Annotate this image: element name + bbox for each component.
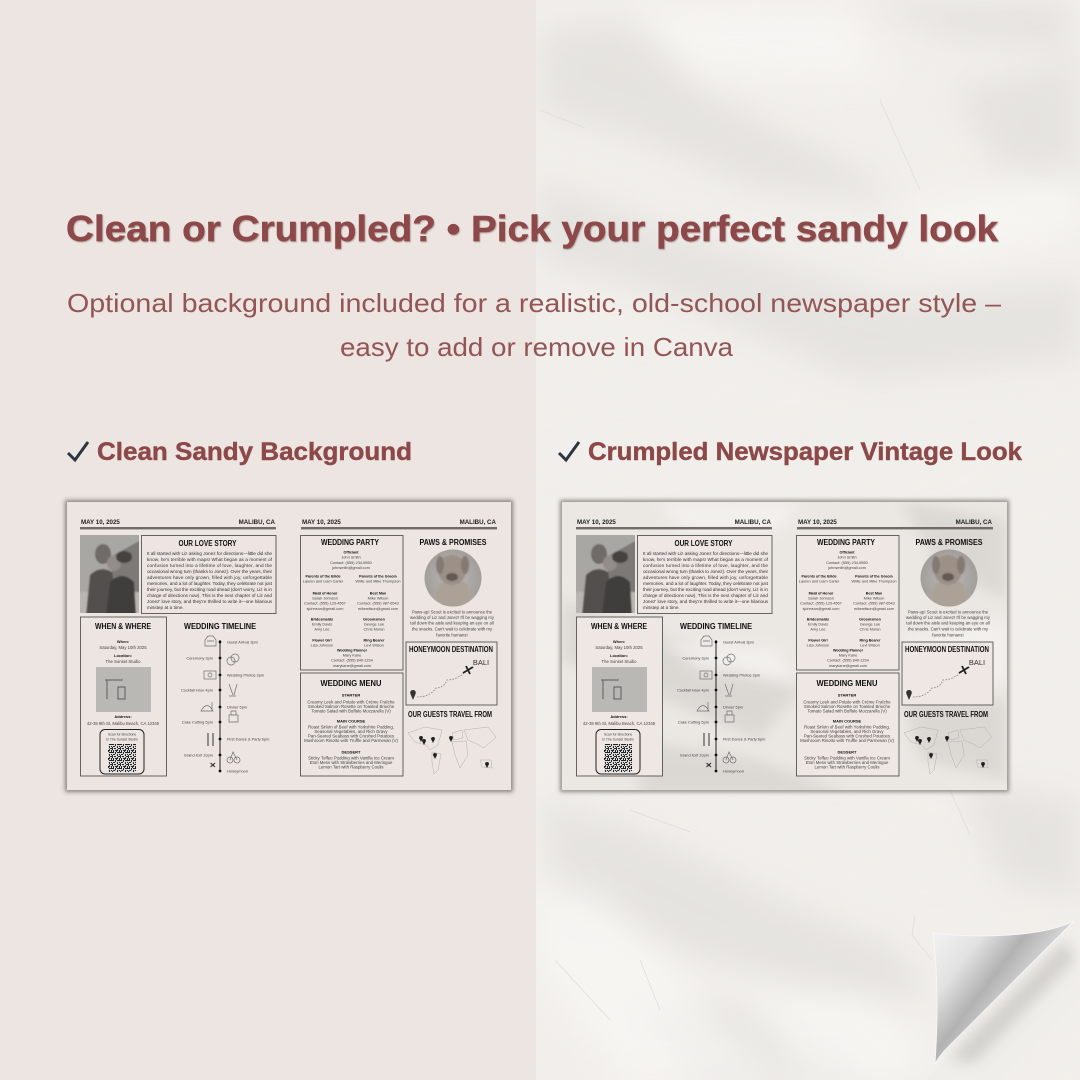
panel: wedding menu: MAIN COURSE	[337, 718, 366, 724]
panel: wedding party: Amy Lee	[810, 628, 826, 632]
panel: when and where: Address:	[114, 714, 132, 719]
panel: wedding menu: STARTER	[342, 692, 360, 698]
chart: wedding timeline	[677, 621, 765, 774]
icon: check mark right	[559, 442, 579, 460]
panel: wedding party: Contact: (555) 987-6543	[853, 602, 895, 606]
left page header: MALIBU, CA	[239, 519, 276, 526]
panel: wedding party: Flower Girl	[312, 638, 332, 642]
panel: wedding menu: WEDDING MENU	[320, 678, 382, 688]
panel: our love story: OUR LOVE STORY	[178, 538, 237, 548]
panel: wedding menu: Tomato Salad with Buffalo Mozzarella (V)	[311, 708, 391, 714]
title: Clean or Crumpled? • Pick your perfect sandy look	[66, 208, 999, 249]
left page header: MAY 10, 2025	[577, 519, 616, 526]
chart: wedding timeline: WEDDING TIMELINE	[680, 621, 752, 631]
panel: honeymoon destination: BALI	[473, 658, 489, 667]
chart: wedding timeline: Guest Arrival 3pm	[723, 640, 754, 644]
panel: paws and promises: wedding of Liz and Jonez! I'll be wagging my	[906, 615, 991, 620]
panel: wedding menu	[300, 673, 403, 776]
right page header: MALIBU, CA	[956, 519, 993, 526]
panel: paws and promises: favorite humans!	[436, 632, 468, 638]
panel: clean newspaper preview	[65, 500, 513, 792]
panel: wedding party: sjohnson@gmail.com	[307, 607, 343, 611]
panel: our love story: occasional wrong turn (thanks to Jonez). Over the years, their	[147, 569, 272, 574]
panel: wedding party: johnsmith@gmail.com	[827, 566, 866, 570]
chart: wedding timeline	[181, 621, 269, 774]
panel: our love story: It all started with Liz asking Jonez for directions—little did she	[643, 551, 768, 556]
panel: honeymoon destination: HONEYMOON DESTINATION	[905, 644, 989, 654]
panel: honeymoon destination	[902, 642, 993, 705]
panel: wedding party: Contact: (555) 840-1234	[331, 658, 374, 662]
chart: wedding timeline: WEDDING TIMELINE	[184, 621, 256, 631]
panel: wedding party: Mike Wilson	[864, 596, 884, 600]
panel: when and where: Scan for directions	[108, 732, 136, 736]
chart: wedding timeline: Cake Cutting 5pm	[182, 720, 213, 724]
panel: wedding party: marykane@gmail.com	[333, 664, 371, 668]
panel: crumpled newspaper preview	[560, 500, 1009, 800]
panel: wedding menu: Sticky Toffee Pudding with Vanilla Ice Cream	[804, 756, 890, 760]
panel: wedding party: WEDDING PARTY	[321, 537, 379, 547]
panel: wedding party: John Smith	[837, 556, 857, 560]
panel: our love story: confusion turned into a lifetime of love, laughter, and the	[643, 563, 768, 568]
panel: when and where: When:	[117, 639, 129, 644]
panel: our love story: misstep at a time.	[643, 605, 680, 610]
panel: when and where: Saturday, May 10th 2025	[595, 645, 643, 650]
panel: our love story: misstep at a time.	[147, 605, 184, 610]
panel: wedding menu: Tomato Salad with Buffalo Mozzarella (V)	[807, 708, 887, 714]
panel: wedding party: Wedding Planner	[337, 648, 368, 652]
panel: when and where: 42-38 9th St, Malibu Beach, CA 12345	[87, 721, 160, 726]
right page header	[301, 519, 497, 529]
panel: wedding party: Willie and Mike Thompson	[355, 580, 401, 584]
chart: wedding timeline: Dinner 5pm	[227, 704, 247, 710]
panel: paws and promises: PAWS & PROMISES	[420, 537, 487, 547]
panel: wedding party: Willie and Mike Thompson	[851, 580, 897, 584]
panel: when and where: Address:	[610, 714, 628, 719]
panel: honeymoon destination: BALI	[969, 658, 985, 667]
panel: wedding menu: Seasonal Vegetables, and Rich Gravy	[810, 729, 884, 734]
panel: wedding party: John Smith	[341, 556, 361, 560]
panel: wedding party: Ring Bearer	[860, 638, 881, 642]
panel: paws and promises: the snacks. Can't wait to celebrate with my	[412, 626, 493, 632]
right page header	[797, 519, 993, 529]
panel: when and where: When:	[613, 639, 625, 644]
right page header: MAY 10, 2025	[302, 519, 341, 526]
panel: wedding party	[796, 536, 899, 670]
panel: when and where: Location:	[610, 653, 628, 658]
right page header: MALIBU, CA	[460, 519, 497, 526]
panel: wedding menu: MAIN COURSE	[833, 718, 862, 724]
panel: paws and promises: Paws-up! Scout is excited to announce the	[412, 610, 493, 614]
panel: when and where: WHEN & WHERE	[591, 621, 647, 631]
panel: when and where: The Sunset Studio	[602, 659, 637, 664]
panel: wedding party: WEDDING PARTY	[817, 537, 875, 547]
panel: wedding menu: Eton Mess with Strawberries and Meringue	[806, 760, 889, 765]
panel: honeymoon destination: HONEYMOON DESTINATION	[409, 644, 493, 654]
panel: our love story: adventures have only grown, filled with joy, unforgettable	[643, 575, 768, 580]
panel: when and where: Scan for directions	[604, 732, 632, 736]
panel: wedding party: Contact: (555) 234-5550	[826, 561, 868, 565]
panel: wedding party: Contact: (555) 123-4567	[304, 602, 346, 606]
chart: wedding timeline: Cocktail Hour 4pm	[181, 688, 213, 692]
panel: when and where: The Sunset Studio	[106, 659, 141, 664]
panel: when and where: Saturday, May 10th 2025	[99, 645, 147, 650]
panel: wedding party: Best Man	[370, 592, 387, 596]
panel: when and where	[576, 617, 662, 776]
panel: wedding party: Maid of Honor	[313, 592, 338, 596]
panel: wedding menu: Seasonal Vegetables, and Rich Gravy	[314, 729, 388, 734]
chart: wedding timeline: Honeymoon	[723, 768, 744, 774]
crumpled paper background	[536, 0, 1080, 1080]
timeline icons	[201, 636, 240, 763]
chart: wedding timeline: Honeymoon	[227, 768, 248, 774]
panel: wedding party: mikewilson@gmail.com	[854, 607, 894, 611]
left page header: MAY 10, 2025	[81, 519, 120, 526]
panel: wedding party: Emily Davis	[312, 622, 332, 626]
panel: wedding party: Officiant	[344, 550, 359, 554]
panel: wedding party: Lauren and Liam Carter	[799, 580, 840, 584]
chart: wedding timeline: Grand Exit 10pm	[680, 752, 709, 758]
panel: wedding party: Levi Wilson	[364, 644, 384, 648]
heading: clean sandy background: Clean Sandy Background	[97, 438, 412, 466]
chart: wedding timeline: Dinner 5pm	[723, 704, 743, 710]
chart: wedding timeline: First Dance & Party 6pm	[723, 736, 765, 742]
panel: wedding party: George Lee	[860, 622, 880, 626]
panel: our love story: charge of directions now). This is the next chapter of Liz and	[147, 593, 272, 598]
panel: our love story: Jonez' love story, and they're thrilled to write it—one hilarious	[147, 599, 273, 604]
panel: our love story: know, he's terrible with maps! What began as a moment of	[147, 557, 273, 562]
panel: wedding party: Ring Bearer	[364, 638, 385, 642]
panel: wedding party: Emily Davis	[808, 622, 828, 626]
panel: paws and promises: tail down the aisle and keeping an eye on all	[906, 620, 990, 626]
panel: wedding menu: Lemon Tart with Raspberry Coulis	[814, 764, 880, 770]
left page header	[80, 519, 276, 529]
panel: wedding party: Amy Lee	[314, 628, 330, 632]
panel: wedding party: sjohnson@gmail.com	[803, 607, 839, 611]
panel: wedding party: Bridesmaids	[311, 618, 333, 622]
chart: wedding timeline: Cocktail Hour 4pm	[677, 688, 709, 692]
panel: wedding menu: Smoked Salmon Rosette on Toasted Brioche	[804, 704, 891, 709]
panel: wedding party: Mary Kane	[343, 654, 361, 658]
panel: our love story: charge of directions now). This is the next chapter of Liz and	[643, 593, 768, 598]
panel: wedding menu: Roast Sirloin of Beef with Yorkshire Pudding,	[308, 724, 394, 730]
panel: paws and promises: tail down the aisle and keeping an eye on all	[410, 620, 494, 626]
panel: paws and promises: PAWS & PROMISES	[916, 537, 983, 547]
photo: couple	[576, 535, 635, 613]
chart: guest world map	[904, 727, 992, 774]
panel: our love story: Jonez' love story, and they're thrilled to write it—one hilarious	[643, 599, 769, 604]
panel: wedding party: Parents of the Groom	[359, 574, 398, 578]
panel: our love story	[142, 536, 276, 614]
subtitle	[67, 288, 1002, 362]
panel: wedding menu: DESSERT	[342, 750, 361, 754]
panel: wedding party: Bridesmaids	[807, 618, 829, 622]
chart: wedding timeline: Ceremony 3pm	[682, 656, 709, 660]
panel: wedding party: Lauren and Liam Carter	[303, 580, 344, 584]
panel: wedding party: Mike Wilson	[368, 596, 388, 600]
panel: wedding party: Levi Wilson	[860, 644, 880, 648]
icon: check mark left	[68, 442, 88, 460]
panel: wedding menu: Mushroom Risotto with Truffle and Parmesan (V)	[800, 738, 894, 743]
panel: wedding party: Lisa Johnson	[311, 644, 333, 648]
panel: paws and promises	[410, 537, 495, 638]
panel: paws and promises: the snacks. Can't wait to celebrate with my	[908, 626, 989, 632]
panel: wedding menu: Smoked Salmon Rosette on Toasted Brioche	[308, 704, 395, 709]
panel: when and where: to The Sunset Studio	[106, 738, 138, 742]
panel: our love story: know, he's terrible with maps! What began as a moment of	[643, 557, 769, 562]
panel: wedding party: Sarah Johnson	[312, 596, 338, 600]
panel: wedding party: Flower Girl	[808, 638, 828, 642]
panel: wedding menu: Sticky Toffee Pudding with Vanilla Ice Cream	[308, 756, 394, 760]
panel: wedding party: Chris Moran	[860, 628, 880, 632]
panel: wedding party: Groomsmen	[363, 618, 386, 622]
panel: when and where: Location:	[114, 653, 132, 658]
panel: wedding menu: Eton Mess with Strawberries and Meringue	[310, 760, 393, 765]
panel: paws and promises: favorite humans!	[932, 632, 964, 638]
panel: wedding party: johnsmith@gmail.com	[331, 566, 370, 570]
panel: wedding party: George Lee	[364, 622, 384, 626]
panel: wedding menu	[796, 673, 899, 776]
timeline icons	[697, 636, 736, 763]
panel: our love story: occasional wrong turn (thanks to Jonez). Over the years, their	[643, 569, 768, 574]
panel: wedding party: Parents of the Bride	[801, 574, 837, 578]
panel: when and where: to The Sunset Studio	[602, 738, 634, 742]
panel: our love story: adventures have only grown, filled with joy, unforgettable	[147, 575, 272, 580]
panel: wedding party	[300, 536, 403, 670]
panel: wedding party: marykane@gmail.com	[829, 664, 867, 668]
panel: when and where: WHEN & WHERE	[95, 621, 151, 631]
panel: wedding party: Sarah Johnson	[808, 596, 834, 600]
panel: wedding party: Mary Kane	[839, 654, 857, 658]
panel: wedding party: Maid of Honor	[809, 592, 834, 596]
chart: guest world map	[408, 727, 496, 774]
panel: wedding party: Contact: (555) 987-6543	[357, 602, 399, 606]
heading: our guests travel from: OUR GUESTS TRAVEL FROM	[408, 709, 492, 719]
panel: wedding menu: Mushroom Risotto with Truffle and Parmesan (V)	[304, 738, 398, 743]
panel: wedding party: Best Man	[866, 592, 883, 596]
panel: wedding party: Contact: (555) 234-5550	[330, 561, 372, 565]
panel: wedding menu: Creamy Leek and Potato with Crème Fraîche	[803, 700, 891, 704]
panel: wedding party: mikewilson@gmail.com	[358, 607, 398, 611]
chart: wedding timeline: Ceremony 3pm	[186, 656, 213, 660]
panel: paws and promises	[906, 537, 991, 638]
panel: our love story	[638, 536, 772, 614]
panel: wedding party: Wedding Planner	[833, 648, 864, 652]
panel: our love story: OUR LOVE STORY	[674, 538, 733, 548]
chart: wedding timeline: First Dance & Party 6pm	[227, 736, 269, 742]
panel: wedding party: Parents of the Groom	[855, 574, 894, 578]
panel: wedding menu: WEDDING MENU	[816, 678, 878, 688]
left page header: MALIBU, CA	[735, 519, 772, 526]
panel: when and where	[80, 617, 166, 776]
heading: crumpled newspaper: Crumpled Newspaper Vintage Look	[588, 438, 1022, 466]
panel: wedding menu: STARTER	[838, 692, 856, 698]
panel: paws and promises: Paws-up! Scout is excited to announce the	[908, 610, 989, 614]
panel: our love story: their journey, but the exciting road ahead (don't worry, Liz is in	[147, 587, 272, 592]
panel: wedding party: Chris Moran	[364, 628, 384, 632]
panel: wedding menu: Pan-Seared Seabass with Crushed Potatoes	[804, 734, 891, 738]
panel: wedding party: Lisa Johnson	[807, 644, 829, 648]
heading: our guests travel from: OUR GUESTS TRAVEL FROM	[904, 709, 988, 719]
panel: wedding party: Groomsmen	[859, 618, 882, 622]
panel: our love story: memories, and a lot of laughter. Today, they celebrate not just	[147, 581, 273, 586]
chart: wedding timeline: Grand Exit 10pm	[184, 752, 213, 758]
panel: our love story: It all started with Liz asking Jonez for directions—little did she	[147, 551, 272, 556]
panel: wedding party: Parents of the Bride	[305, 574, 341, 578]
panel: when and where: 42-38 9th St, Malibu Beach, CA 12345	[583, 721, 656, 726]
panel: honeymoon destination	[406, 642, 497, 705]
panel: paws and promises: wedding of Liz and Jonez! I'll be wagging my	[410, 615, 495, 620]
chart: wedding timeline: Cake Cutting 5pm	[678, 720, 709, 724]
panel: our love story: memories, and a lot of laughter. Today, they celebrate not just	[643, 581, 769, 586]
panel: our love story: confusion turned into a lifetime of love, laughter, and the	[147, 563, 272, 568]
panel: wedding party: Contact: (555) 840-1234	[827, 658, 870, 662]
chart: wedding timeline: Wedding Photos 3pm	[227, 672, 264, 678]
chart: wedding timeline: Wedding Photos 3pm	[723, 672, 760, 678]
subtitle: easy to add or remove in Canva	[340, 332, 734, 362]
chart: wedding timeline: Guest Arrival 3pm	[227, 640, 258, 644]
panel: wedding party: Officiant	[840, 550, 855, 554]
left page header	[576, 519, 772, 529]
photo: couple	[80, 535, 139, 613]
page curl	[925, 921, 1080, 1080]
panel: wedding party: Contact: (555) 123-4567	[800, 602, 842, 606]
panel: wedding menu: Creamy Leek and Potato with Crème Fraîche	[307, 700, 395, 704]
panel: our love story: their journey, but the exciting road ahead (don't worry, Liz is in	[643, 587, 768, 592]
panel: wedding menu: Pan-Seared Seabass with Crushed Potatoes	[308, 734, 395, 738]
panel: wedding menu: Lemon Tart with Raspberry Coulis	[318, 764, 384, 770]
panel: wedding menu: DESSERT	[838, 750, 857, 754]
subtitle: Optional background included for a realistic, old-school newspaper style –	[67, 288, 1002, 318]
right page header: MAY 10, 2025	[798, 519, 837, 526]
panel: wedding menu: Roast Sirloin of Beef with Yorkshire Pudding,	[804, 724, 890, 730]
